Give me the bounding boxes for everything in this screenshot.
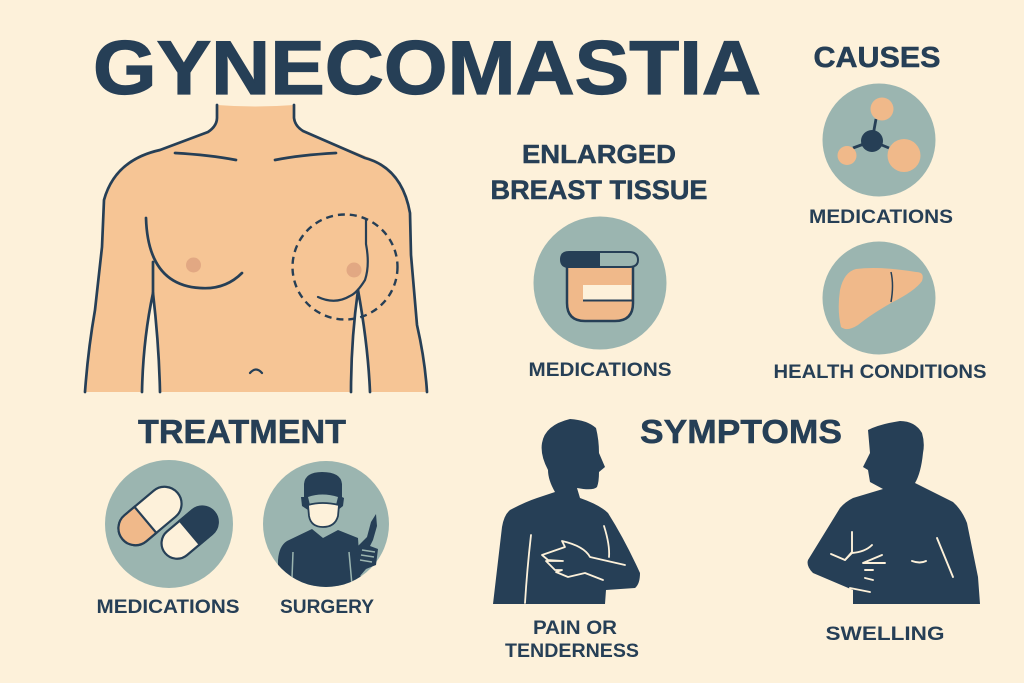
label: medications (treatment): MEDICATIONS <box>96 597 240 618</box>
icon: medication jar <box>534 216 666 350</box>
icon: man with swelling <box>808 421 980 604</box>
icon: pills <box>105 460 233 588</box>
heading: enlarged breast tissue: BREAST TISSUE <box>490 175 708 205</box>
label: medications (causes): MEDICATIONS <box>809 207 953 228</box>
nipples <box>186 258 201 272</box>
label: health conditions: HEALTH CONDITIONS <box>774 362 986 383</box>
label: pain or tenderness: TENDERNESS <box>505 641 639 662</box>
heading: causes: CAUSES <box>814 42 940 74</box>
illustration: male chest with enlarged breast <box>85 105 427 392</box>
icon: man with pain or tenderness <box>493 419 640 604</box>
heading: treatment: TREATMENT <box>138 413 346 450</box>
title: GYNECOMASTIA <box>93 26 761 111</box>
label: surgery: SURGERY <box>280 597 374 618</box>
label: swelling: SWELLING <box>826 624 944 645</box>
dashed circle around enlarged breast <box>292 214 398 320</box>
icon: molecule <box>822 84 936 196</box>
label: pain or tenderness <box>505 618 639 662</box>
heading: symptoms: SYMPTOMS <box>640 413 842 450</box>
icon: liver <box>822 242 936 354</box>
icon: surgeon <box>263 461 389 600</box>
label: medications (center): MEDICATIONS <box>528 360 672 381</box>
heading: enlarged breast tissue <box>490 139 708 205</box>
heading: enlarged breast tissue: ENLARGED <box>522 139 676 169</box>
label: pain or tenderness: PAIN OR <box>533 618 617 639</box>
